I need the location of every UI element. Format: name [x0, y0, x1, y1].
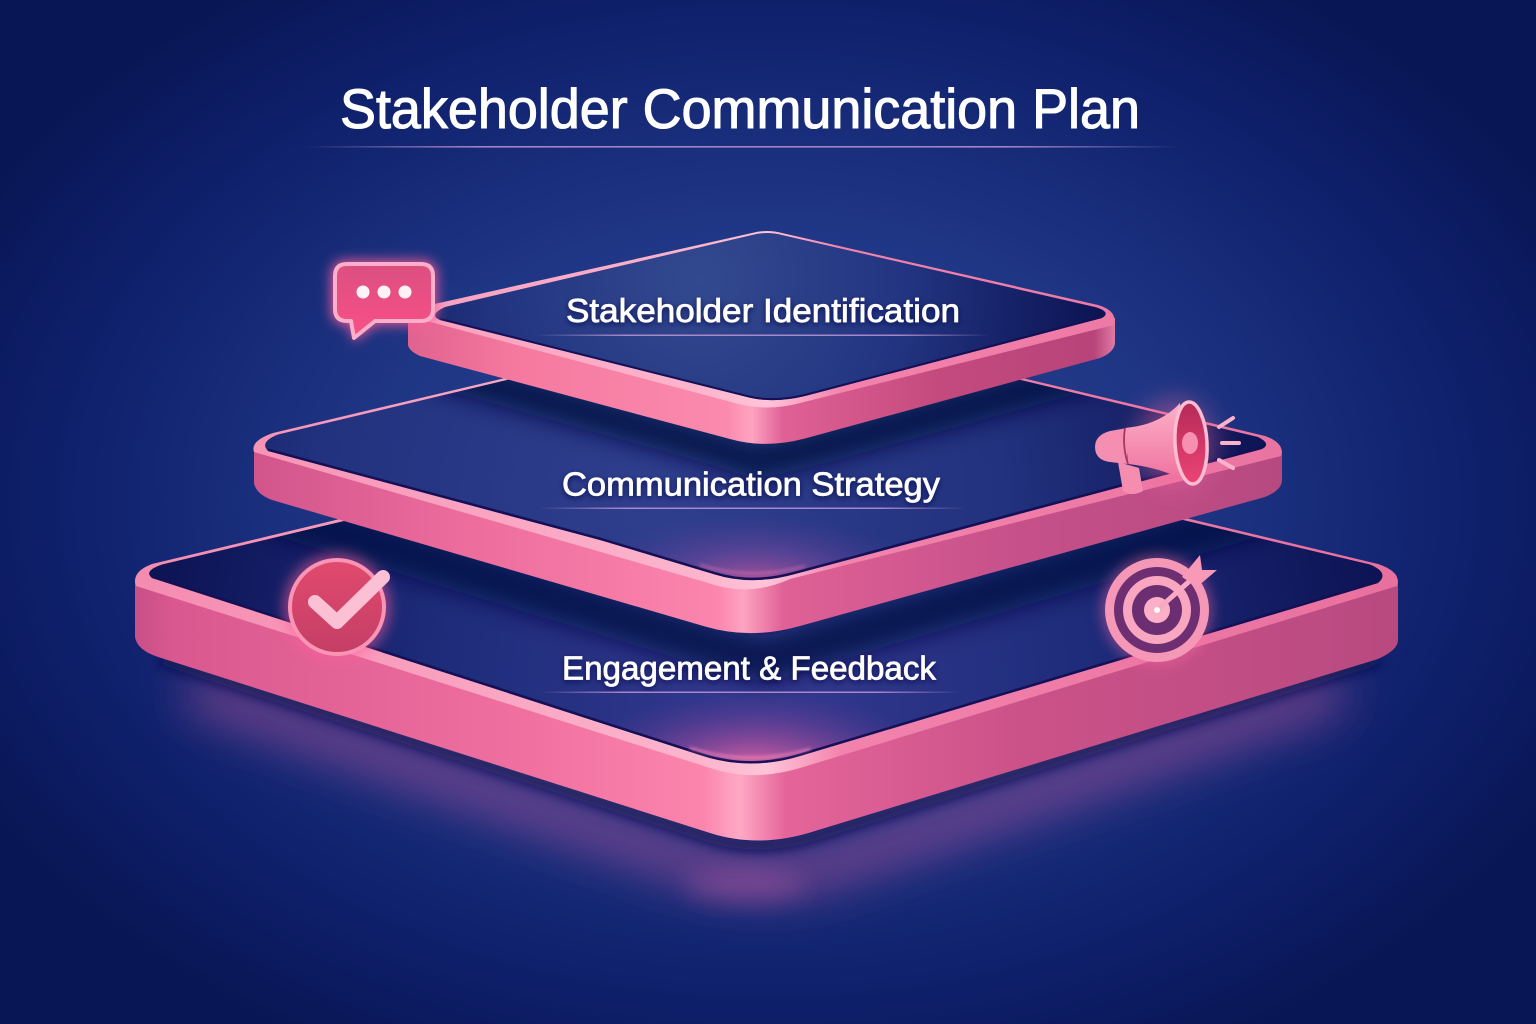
- label: Stakeholder Identification: Stakeholder Identification: [566, 292, 960, 329]
- tier 2 side wall: [254, 450, 1282, 633]
- tier 3 rim: [135, 420, 1398, 775]
- label: Engagement & Feedback: Engagement & Feedback: [562, 650, 936, 686]
- icon: checkmark badge: [283, 553, 391, 661]
- tier 3 top face: [149, 422, 1382, 764]
- tier 3 side wall: [135, 580, 1398, 841]
- panel: tier 3 Engagement & Feedback: [135, 518, 1398, 840]
- tier 1 top face: [435, 233, 1106, 400]
- panel: tier 1 Stakeholder Identification: [408, 231, 1115, 444]
- icon: megaphone: [1095, 398, 1239, 494]
- title underline: [305, 146, 1180, 148]
- title: Stakeholder Communication Plan: [340, 77, 1140, 140]
- label: Communication Strategy: Communication Strategy: [562, 466, 941, 502]
- panel: tier 2 Communication Strategy: [253, 378, 1282, 634]
- glow under the base platform: [160, 660, 1380, 901]
- tier 2 top face: [265, 320, 1266, 580]
- tier 2 rim: [253, 318, 1282, 589]
- icon: chat bubble: [331, 260, 437, 342]
- icon: target with arrow: [1101, 554, 1217, 666]
- tier 1 rim: [408, 231, 1115, 408]
- tier 1 side wall: [408, 316, 1115, 444]
